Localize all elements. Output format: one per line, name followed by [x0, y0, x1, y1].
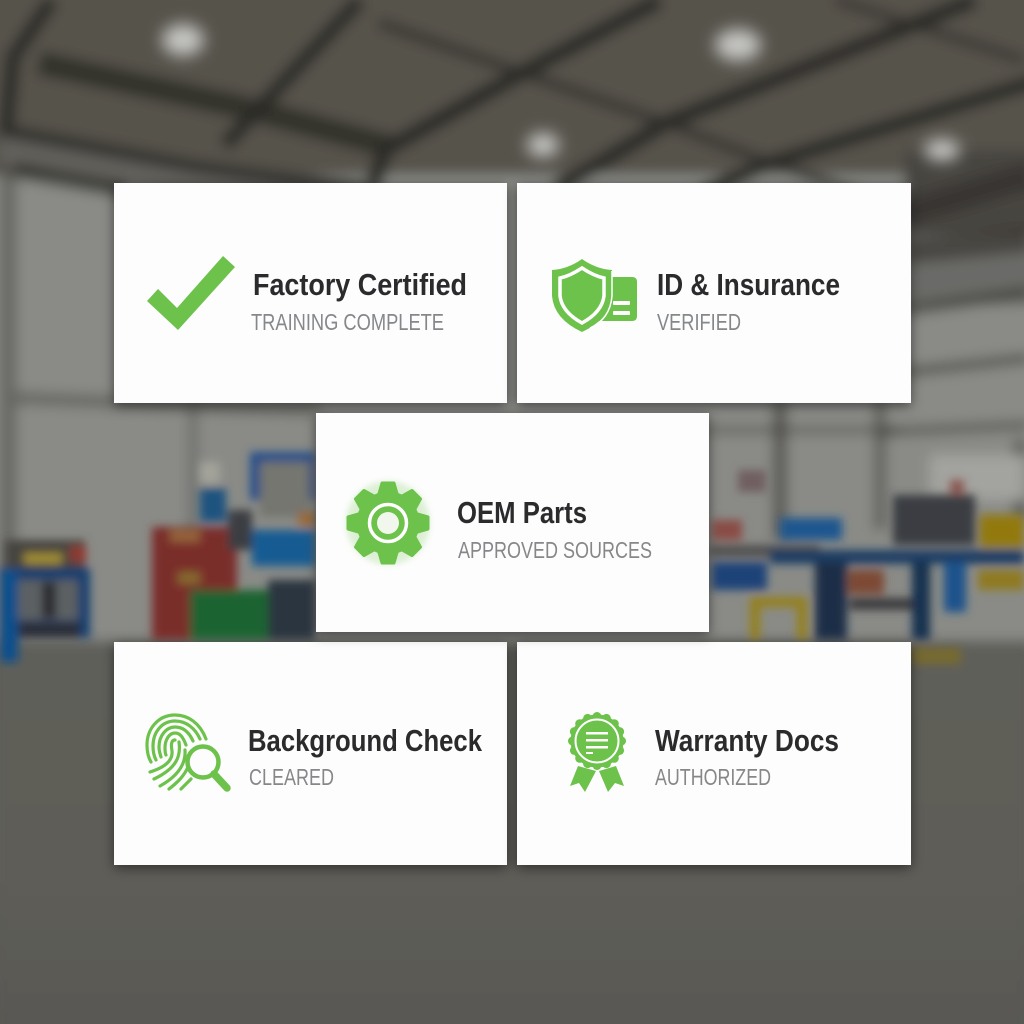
heading: Background Check: Background Check [248, 723, 483, 758]
heading: Warranty Docs: Warranty Docs [655, 723, 839, 758]
panel: ID and Insurance [517, 183, 911, 403]
icon: fingerprint and magnifier [147, 715, 227, 789]
text: Approved Sources: APPROVED SOURCES [458, 537, 652, 563]
icon: check mark [147, 256, 235, 330]
icon: gear [346, 481, 430, 565]
panel: Background Check [114, 642, 507, 865]
text: Cleared: CLEARED [249, 764, 334, 790]
heading: Factory Certified: Factory Certified [253, 267, 467, 302]
heading: OEM Parts: OEM Parts [457, 495, 587, 530]
text: Training Complete: TRAINING COMPLETE [251, 309, 444, 335]
icon: shield and ID card [552, 259, 637, 332]
panel: OEM Parts [316, 413, 709, 632]
panel: Factory Certified [114, 183, 507, 403]
heading: ID & Insurance: ID & Insurance [657, 267, 840, 302]
panel: Warranty Docs [517, 642, 911, 865]
icon: award ribbon [568, 712, 626, 792]
text: Authorized: AUTHORIZED [655, 764, 771, 790]
text: Verified: VERIFIED [657, 309, 741, 335]
